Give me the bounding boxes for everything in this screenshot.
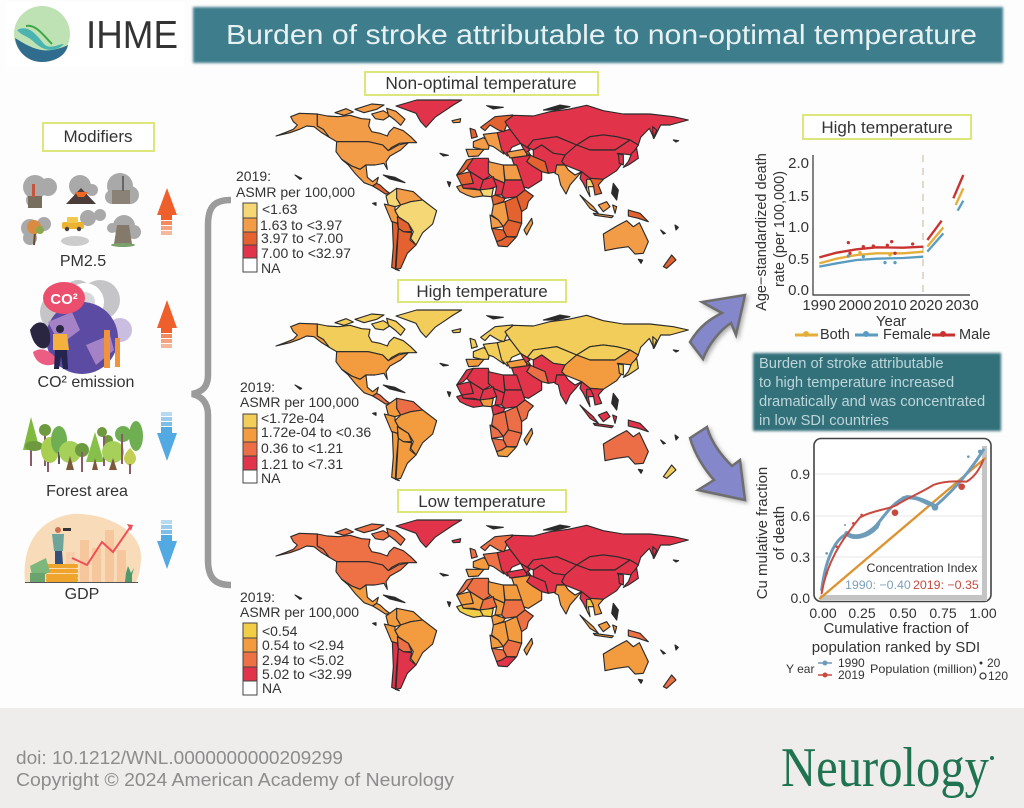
map: non-optimal temperature bbox=[276, 100, 688, 271]
heading: High temperature bbox=[398, 280, 566, 302]
title banner bbox=[193, 7, 1003, 63]
concentration curve chart: 1.00 bbox=[969, 605, 997, 621]
icon: CO2 emission: CO² bbox=[50, 291, 78, 308]
legend: non-optimal temperature: 3.97 to <7.00 bbox=[261, 230, 343, 246]
callout: key finding: to high temperature increased bbox=[759, 375, 954, 391]
concentration curve chart: 0.50 bbox=[889, 605, 917, 621]
title banner: Burden of stroke attributable to non-optimal temperature bbox=[226, 19, 977, 50]
chart legend: Male bbox=[959, 327, 990, 343]
chart legend: Population (million) bbox=[870, 662, 977, 676]
concentration curve chart: 0.9 bbox=[791, 466, 810, 482]
legend: non-optimal temperature: NA bbox=[261, 260, 281, 276]
chart legend bbox=[786, 656, 1008, 683]
legend: low temperature: 0.54 to <2.94 bbox=[262, 637, 344, 653]
icon group: PM2.5 pollution sources bbox=[21, 173, 141, 270]
legend: low temperature bbox=[240, 589, 359, 696]
line chart: age-standardized death rate: 2.0 bbox=[788, 155, 809, 172]
arrow: GDP down bbox=[157, 520, 177, 569]
heading: High temperature: High temperature bbox=[416, 282, 548, 301]
arrow: maps to line chart bbox=[690, 295, 745, 359]
heading: Non-optimal temperature: Non-optimal temperature bbox=[385, 73, 577, 93]
legend: non-optimal temperature bbox=[236, 168, 355, 276]
concentration curve chart: 0.0 bbox=[791, 590, 810, 606]
chart legend: 2019 bbox=[838, 668, 865, 682]
logo: IHME bbox=[6, 2, 184, 66]
citation text bbox=[16, 748, 454, 790]
brace linking modifiers to maps bbox=[192, 200, 231, 585]
arrow: maps to concentration curve bbox=[690, 427, 745, 500]
concentration curve chart: 0.6 bbox=[791, 508, 810, 524]
arrow: forest down bbox=[157, 412, 177, 461]
arrow: PM2.5 up bbox=[157, 188, 177, 235]
x axis title: population ranked by SDI bbox=[812, 639, 980, 656]
legend: high temperature: 2019: bbox=[240, 379, 275, 395]
icon: CO2 emission bbox=[30, 280, 134, 391]
legend: low temperature: <0.54 bbox=[262, 623, 298, 639]
concentration index annotation: Concentration Index bbox=[867, 561, 978, 575]
line chart: age-standardized death rate: 1.5 bbox=[788, 188, 809, 205]
concentration index annotation: 2019: −0.35 bbox=[913, 578, 979, 592]
callout: key finding bbox=[753, 353, 1001, 431]
heading: Low temperature bbox=[398, 490, 566, 512]
chart legend: 1990 bbox=[838, 656, 865, 670]
callout: key finding: in low SDI countries bbox=[759, 413, 889, 429]
line chart: age-standardized death rate: Year bbox=[876, 313, 906, 330]
legend: non-optimal temperature: 7.00 to <32.97 bbox=[261, 245, 351, 261]
legend: low temperature: NA bbox=[262, 680, 282, 696]
line chart: age-standardized death rate: 1.0 bbox=[788, 219, 809, 236]
legend: high temperature bbox=[240, 379, 371, 486]
legend: non-optimal temperature: 2019: bbox=[236, 168, 271, 184]
concentration curve chart bbox=[754, 438, 1008, 683]
map: low temperature bbox=[276, 520, 688, 691]
legend: low temperature: 2019: bbox=[240, 589, 275, 605]
legend: non-optimal temperature: 1.63 to <3.97 bbox=[260, 217, 342, 233]
footer band bbox=[0, 708, 1024, 808]
heading: Low temperature: Low temperature bbox=[418, 492, 546, 511]
y axis title: Age−standardized death bbox=[754, 153, 770, 311]
concentration index annotation bbox=[845, 561, 979, 592]
y axis title: Cu mulative fraction bbox=[754, 467, 771, 599]
icon: GDP chart bbox=[25, 514, 141, 603]
heading: Modifiers: Modifiers bbox=[64, 127, 132, 146]
legend: high temperature: 1.72e-04 to <0.36 bbox=[261, 424, 371, 440]
label: PM2.5: PM2.5 bbox=[60, 253, 106, 270]
legend: non-optimal temperature: ASMR per 100,000 bbox=[236, 184, 355, 200]
chart legend bbox=[795, 327, 990, 343]
y axis title: rate (per 100,000) bbox=[772, 171, 788, 287]
y axis title bbox=[754, 153, 788, 311]
arrow: CO2 up bbox=[157, 300, 177, 348]
legend: high temperature: <1.72e-04 bbox=[261, 410, 325, 426]
legend: high temperature: 0.36 to <1.21 bbox=[261, 440, 343, 456]
map: high temperature bbox=[276, 310, 688, 481]
heading: Modifiers bbox=[43, 123, 154, 151]
concentration curve chart: 0.00 bbox=[809, 605, 837, 621]
legend: low temperature: 2.94 to <5.02 bbox=[262, 652, 344, 668]
chart legend: Both bbox=[820, 327, 850, 343]
legend: high temperature: 1.21 to <7.31 bbox=[261, 456, 343, 472]
concentration curve chart: 0.75 bbox=[929, 605, 957, 621]
line chart: age-standardized death rate: 0.5 bbox=[788, 251, 809, 268]
y axis title: of death bbox=[771, 506, 788, 560]
concentration curve chart: 0.3 bbox=[791, 549, 810, 565]
chart legend: 20 bbox=[987, 656, 1001, 670]
label: GDP: GDP bbox=[65, 586, 99, 603]
legend: low temperature: ASMR per 100,000 bbox=[240, 604, 359, 620]
citation text: Copyright © 2024 American Academy of Neurology bbox=[16, 770, 454, 790]
citation text: doi: 10.1212/WNL.0000000000209299 bbox=[16, 748, 343, 768]
label: CO2 emission: CO² emission bbox=[38, 374, 134, 391]
concentration index annotation: 1990: −0.40 bbox=[845, 578, 911, 592]
legend: low temperature: 5.02 to <32.99 bbox=[262, 666, 352, 682]
line chart: age-standardized death rate: 1990 bbox=[802, 297, 836, 314]
legend: high temperature: ASMR per 100,000 bbox=[240, 394, 359, 410]
logo: IHME: IHME bbox=[86, 14, 178, 57]
chart legend: Female bbox=[883, 327, 931, 343]
x axis title: Cumulative fraction of bbox=[823, 620, 969, 637]
chart legend: 120 bbox=[988, 669, 1008, 683]
chart legend: Y ear bbox=[786, 662, 814, 676]
line chart: age-standardized death rate bbox=[754, 153, 990, 343]
logo: Neurology: Neurology bbox=[781, 737, 989, 799]
x axis title bbox=[812, 620, 980, 656]
y axis title bbox=[754, 467, 788, 599]
icon: forest area bbox=[23, 417, 143, 500]
legend: non-optimal temperature: <1.63 bbox=[262, 201, 298, 217]
legend: high temperature: NA bbox=[261, 470, 281, 486]
line chart: age-standardized death rate: 2020 bbox=[909, 297, 943, 314]
line chart: age-standardized death rate: 2010 bbox=[873, 297, 907, 314]
heading: High temperature trend: High temperature bbox=[821, 118, 953, 137]
callout: key finding: dramatically and was concentrated bbox=[759, 394, 985, 410]
heading: High temperature trend bbox=[803, 115, 971, 139]
label: forest area: Forest area bbox=[46, 483, 128, 500]
line chart: age-standardized death rate: 2000 bbox=[838, 297, 872, 314]
concentration curve chart: 0.25 bbox=[848, 605, 876, 621]
line chart: age-standardized death rate: 2030 bbox=[945, 297, 979, 314]
callout: key finding: Burden of stroke attributable bbox=[759, 356, 944, 372]
line chart: age-standardized death rate: 0.0 bbox=[788, 282, 809, 299]
